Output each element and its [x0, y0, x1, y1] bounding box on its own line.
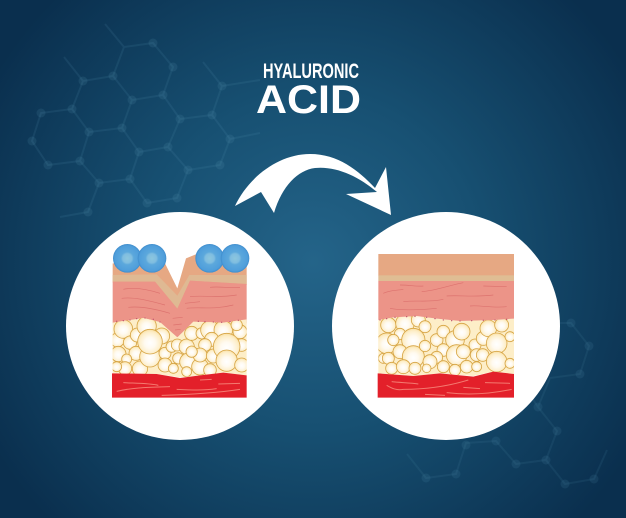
dots along dermis edge — [379, 316, 507, 322]
circle: right — [332, 212, 560, 440]
panel: before treatment — [66, 212, 294, 440]
epidermis: orange layer — [113, 254, 247, 310]
fat layer — [376, 313, 515, 376]
sphere 1 — [113, 244, 142, 273]
sphere 2 — [138, 244, 166, 273]
title line: hyaluronic: HYALURONIC — [263, 59, 359, 83]
epidermis: tan band — [378, 275, 514, 281]
fat layer — [110, 316, 249, 377]
molecule network: bottom right — [407, 318, 607, 488]
title — [256, 59, 361, 122]
dermis layer — [113, 281, 247, 337]
circle: left — [66, 212, 294, 440]
epidermis: orange layer — [378, 254, 514, 275]
title line: acid: ACID — [256, 78, 361, 122]
muscle layer — [378, 372, 514, 398]
skin cross-section: smooth — [376, 254, 515, 398]
panel: after treatment — [332, 212, 560, 440]
molecule network: top left — [28, 24, 260, 217]
skin cross-section: wrinkled — [110, 244, 249, 398]
epidermis: tan band — [113, 274, 247, 309]
arrow — [235, 154, 391, 215]
hyaluronic acid spheres — [113, 244, 249, 273]
dots along dermis edge — [116, 317, 239, 323]
sphere 4 — [221, 244, 249, 273]
dermis layer — [378, 281, 514, 321]
muscle layer — [112, 373, 247, 398]
sphere 3 — [195, 244, 224, 273]
